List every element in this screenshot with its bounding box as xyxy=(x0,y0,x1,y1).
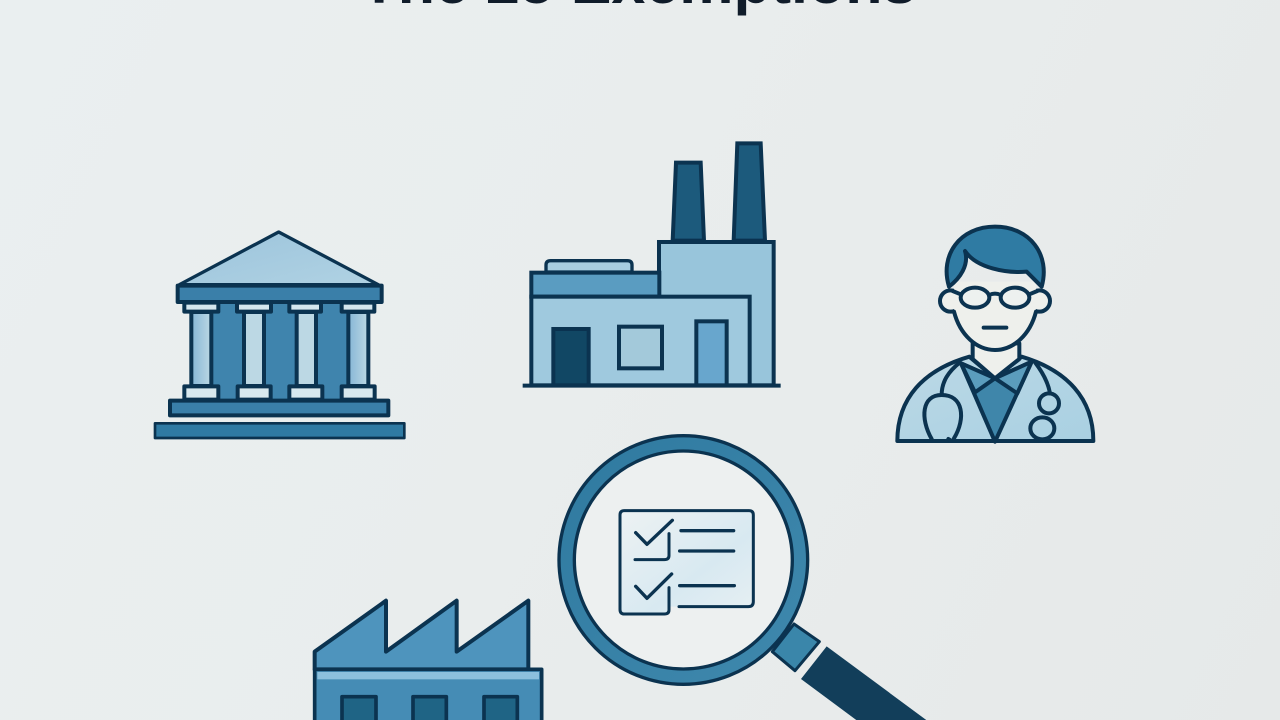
chimney tall xyxy=(734,143,765,241)
hair xyxy=(947,227,1044,287)
handle collar xyxy=(772,624,819,671)
lines xyxy=(680,531,734,586)
upper step xyxy=(170,401,388,415)
main hall xyxy=(531,297,750,385)
icon: classical bank building xyxy=(155,232,404,438)
ground line xyxy=(523,380,781,392)
column 2 xyxy=(237,303,271,400)
icon: factory with two chimneys xyxy=(523,143,781,386)
dark door xyxy=(553,329,589,385)
pediment xyxy=(179,232,378,285)
icon: sawtooth-roof factory xyxy=(315,601,542,720)
sawtooth roof xyxy=(315,601,528,669)
column 3 xyxy=(289,303,322,400)
small roof unit xyxy=(546,261,632,272)
window xyxy=(619,327,662,368)
icon: magnifying glass over checklist xyxy=(567,443,932,720)
collar xyxy=(961,362,1032,393)
shirt xyxy=(961,362,1032,442)
back wall xyxy=(212,302,348,400)
windows xyxy=(342,697,517,720)
mouth xyxy=(984,322,1006,334)
ears xyxy=(940,290,1050,312)
stethoscope xyxy=(924,362,1059,440)
tower xyxy=(659,242,774,385)
roof band xyxy=(531,273,659,297)
neck xyxy=(973,343,1019,378)
blue door xyxy=(696,321,727,385)
light band xyxy=(317,672,539,679)
coat xyxy=(897,357,1093,441)
lower step xyxy=(155,423,404,438)
checkbox 2 xyxy=(636,574,672,598)
entablature xyxy=(178,286,382,302)
column 4 xyxy=(342,303,375,400)
chimney short xyxy=(673,163,704,241)
lens ring xyxy=(567,443,800,677)
icon: doctor with stethoscope xyxy=(897,227,1093,442)
body xyxy=(315,669,542,720)
checkbox 1 xyxy=(636,520,672,544)
column 1 xyxy=(184,303,218,400)
glasses xyxy=(953,288,1037,308)
face xyxy=(954,282,1036,350)
checklist card xyxy=(620,511,753,614)
handle xyxy=(801,646,932,720)
